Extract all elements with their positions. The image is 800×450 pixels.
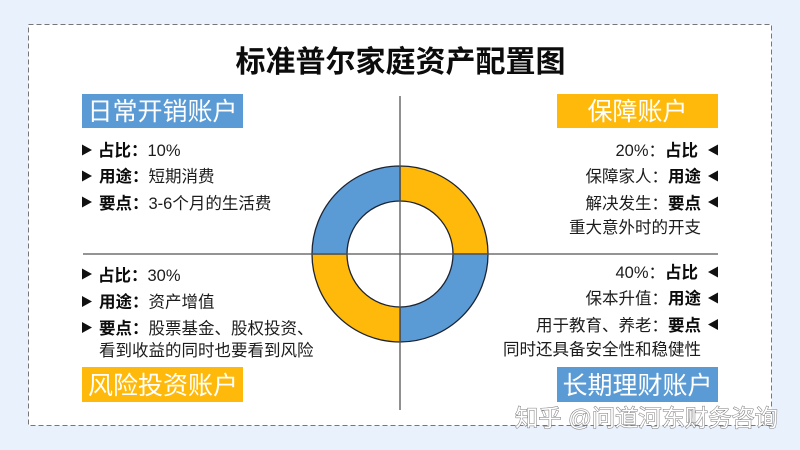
text block: long-term finance details bbox=[503, 263, 718, 359]
text block: protection details: 保障家人：用途 bbox=[586, 166, 702, 186]
chart: donut with axes bbox=[83, 96, 718, 410]
text block: daily spending details: 用途：短期消费 bbox=[99, 166, 214, 186]
text block: long-term finance details: 用于教育、养老：要点 bbox=[536, 316, 701, 335]
heading: daily spending: 日常开销账户 bbox=[87, 98, 238, 126]
text block: protection details: 20%：占比 bbox=[615, 141, 698, 160]
text block: protection details: 解决发生：要点 bbox=[586, 194, 701, 213]
heading: risk investment: 风险投资账户 bbox=[88, 372, 238, 400]
title: 标准普尔家庭资产配置图 bbox=[236, 46, 566, 79]
text block: long-term finance details: 40%：占比 bbox=[615, 263, 698, 282]
text block: daily spending details: 占比：10% bbox=[98, 141, 181, 160]
text block: daily spending details bbox=[82, 141, 271, 213]
text block: long-term finance details: 保本升值：用途 bbox=[586, 288, 702, 308]
panel: risk investment account bbox=[82, 266, 314, 402]
text block: daily spending details: 要点：3-6个月的生活费 bbox=[99, 194, 271, 213]
heading: protection bbox=[557, 94, 718, 128]
heading: long-term finance: 长期理财账户 bbox=[562, 372, 713, 400]
text block: protection details: 重大意外时的开支 bbox=[569, 218, 701, 237]
text block: risk investment details: 占比：30% bbox=[98, 266, 181, 285]
panel: long-term finance account bbox=[503, 263, 718, 402]
watermark: 知乎 @问道河东财务咨询 bbox=[515, 405, 778, 431]
heading: protection: 保障账户 bbox=[587, 98, 688, 126]
panel: protection account bbox=[557, 94, 718, 237]
text block: protection details bbox=[569, 141, 718, 237]
text block: risk investment details: 要点：股票基金、股权投资、 bbox=[99, 319, 314, 338]
text block: risk investment details: 看到收益的同时也要看到风险 bbox=[99, 341, 314, 360]
text block: risk investment details bbox=[82, 266, 314, 360]
panel: daily spending account bbox=[82, 94, 271, 213]
text block: risk investment details: 用途：资产增值 bbox=[99, 292, 214, 312]
text block: long-term finance details: 同时还具备安全性和稳健性 bbox=[503, 340, 701, 359]
